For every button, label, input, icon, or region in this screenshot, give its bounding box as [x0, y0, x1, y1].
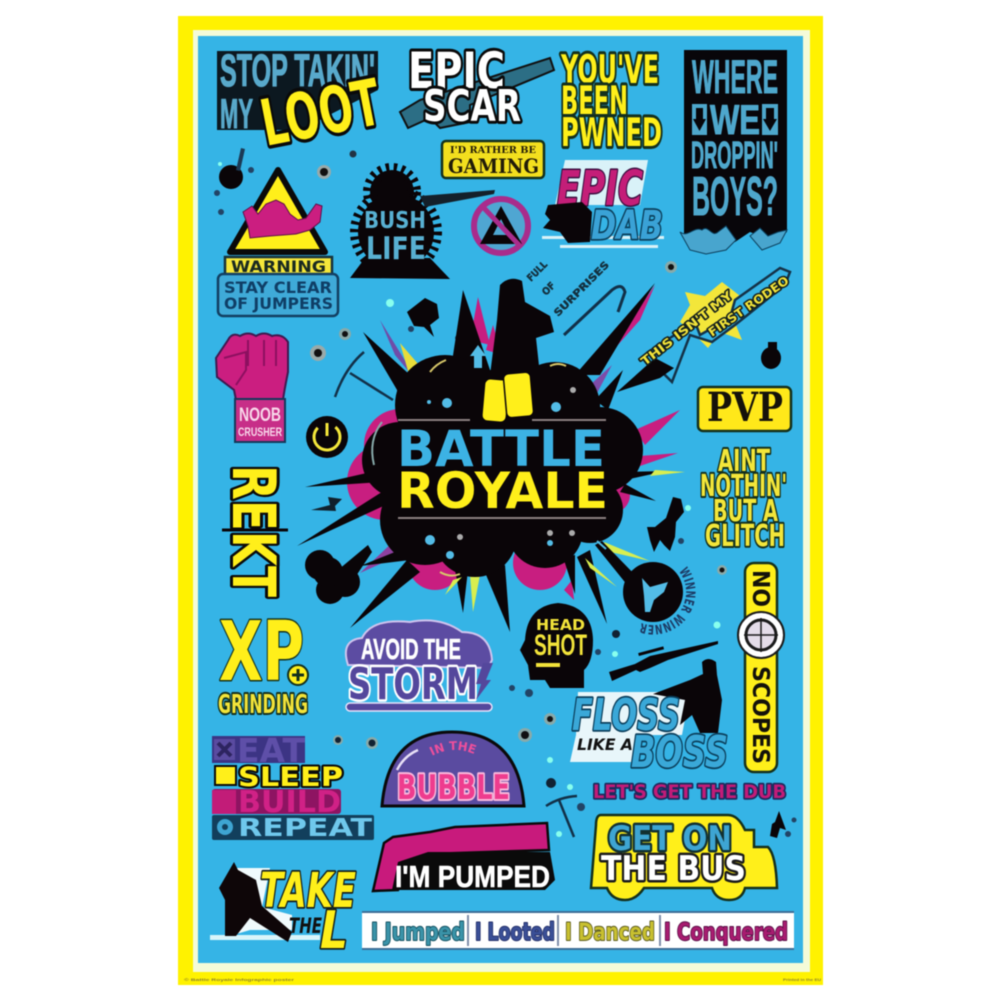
heading: floss like a boss: LIKE A [577, 735, 633, 754]
icon: smoke cloud [305, 545, 372, 604]
icon: rope launcher first rodeo: FIRST RODEO [706, 273, 792, 339]
icon: dog tags [482, 372, 534, 422]
icon: shotgun i'm pumped: I'M PUMPED [395, 859, 550, 894]
heading: xp grinding [218, 605, 308, 720]
icon: fist [216, 334, 288, 442]
heading: you've been pwned: PWNED [561, 111, 662, 156]
panel: warning stay clear of jumpers: OF JUMPERS [224, 294, 333, 313]
panel: i jumped i looted i danced i conquered: I Looted [475, 918, 555, 946]
heading: you've been pwned: BEEN [561, 79, 628, 124]
footer fine print: Printed in the EU [783, 978, 822, 982]
panel: in the bubble [380, 730, 526, 808]
heading: epic scar: EPIC [408, 42, 505, 100]
panel: where we droppin' boys: BOYS? [692, 165, 778, 227]
heading: you've been pwned [560, 48, 662, 156]
icon: bullet mark [770, 811, 796, 838]
heading: epic scar: SCAR [423, 81, 521, 132]
panel: take the l [210, 862, 356, 961]
heading: epic dab: DAB [591, 203, 663, 249]
panel: no scopes: NO [747, 570, 773, 607]
icon: small cloud burst [407, 298, 439, 337]
bullet holes and dots [214, 150, 727, 837]
badge: i'd rather be gaming: I'D RATHER BE [450, 146, 536, 156]
title: battle royale [397, 419, 608, 520]
heading: floss like a boss [570, 659, 728, 778]
panel: warning stay clear of jumpers: STAY CLEAR [224, 278, 332, 297]
title: battle royale: BATTLE [397, 420, 605, 478]
text: full of surprises: FULL [525, 259, 550, 284]
icon: head shot: HEAD [536, 616, 585, 634]
icon: power button [306, 416, 348, 458]
icon: fist: NOOB [239, 405, 281, 426]
heading: aint nothin' but a glitch: AINT [718, 444, 770, 479]
panel: no scopes [738, 563, 784, 772]
heading: aint nothin' but a glitch [700, 444, 787, 554]
panel: i jumped i looted i danced i conquered: I Conquered [664, 918, 788, 946]
panel: where we droppin' boys: DROPPIN' [691, 135, 778, 177]
icon: pickaxe small [546, 796, 577, 837]
icon: llama [647, 497, 684, 552]
icon: hook and rope [564, 286, 625, 335]
icon: rope launcher first rodeo: THIS ISN'T MY [638, 288, 735, 368]
icon: head shot [520, 603, 593, 688]
icon: head shot: SHOT [534, 629, 587, 662]
heading: rekt: REKT [218, 465, 288, 597]
panel: eat sleep build repeat: BUILD [238, 785, 341, 820]
text: full of surprises: OF [540, 280, 558, 298]
heading: aint nothin' but a glitch: GLITCH [705, 519, 785, 554]
text: full of surprises [525, 259, 612, 319]
panel: eat sleep build repeat: REPEAT [238, 813, 372, 842]
icon: lightning bolt [311, 497, 342, 511]
text: full of surprises: SURPRISES [552, 260, 612, 319]
icon: shotgun i'm pumped [373, 823, 555, 894]
heading: stop takin' my loot: LOOT [255, 66, 387, 162]
panel: eat sleep build repeat [212, 731, 374, 842]
panel: get on the bus: THE BUS [601, 849, 746, 889]
heading: aint nothin' but a glitch: BUT A [713, 494, 778, 529]
icon: sniper rifle [609, 641, 718, 681]
heading: floss like a boss: FLOSS [572, 690, 680, 741]
panel: warning stay clear of jumpers [218, 170, 338, 316]
explosion: black spikes [297, 283, 666, 632]
footer fine print [184, 978, 822, 982]
heading: bush life [350, 170, 495, 279]
panel: get on the bus: GET ON [608, 819, 732, 859]
icon: grenade [761, 342, 781, 369]
icon: frying pan winner winner: WINNER WINNER [640, 566, 696, 636]
icon: paint splat ball [219, 148, 245, 189]
heading: aint nothin' but a glitch: NOTHIN' [700, 469, 787, 504]
panel: take the l: TAKE [260, 863, 356, 919]
explosion: magenta backdrop [347, 285, 680, 600]
panel: eat sleep build repeat: SLEEP [238, 762, 343, 793]
heading: epic scar [400, 42, 554, 132]
icon: crossed out triangle [474, 199, 528, 253]
panel: take the l: L [320, 901, 348, 961]
panel: no scopes: SCOPES [747, 666, 773, 764]
heading: avoid the storm: STORM [348, 659, 478, 710]
icon: frying pan winner winner [594, 540, 696, 636]
panel: in the bubble: IN THE [428, 740, 477, 756]
panel: i jumped i looted i danced i conquered [362, 911, 794, 950]
panel: take the l: THE [289, 914, 322, 938]
footer fine print: © Battle Royale Infographic poster [184, 978, 295, 982]
icon: pickaxe [335, 352, 393, 400]
heading: bush life: BUSH [364, 208, 426, 234]
panel: where we droppin' boys: WHERE [692, 50, 778, 103]
heading: epic dab [542, 160, 664, 249]
icon: rope launcher first rodeo [617, 268, 792, 392]
panel: where we droppin' boys: WE [710, 96, 760, 143]
llama silhouette [490, 279, 554, 375]
title: battle royale: ROYALE [397, 462, 608, 520]
panel: where we droppin' boys [680, 50, 787, 254]
icon: fist: CRUSHER [238, 425, 282, 439]
panel: i jumped i looted i danced i conquered: I Jumped [371, 918, 465, 946]
heading: stop takin' my loot: STOP TAKIN' [220, 45, 375, 96]
panel: eat sleep build repeat: EAT [237, 731, 305, 770]
heading: you've been pwned: YOU'VE [560, 48, 659, 93]
heading: xp grinding: GRINDING [218, 690, 308, 720]
heading: epic dab: EPIC [557, 161, 643, 217]
heading: let's get the dub: LET'S GET THE DUB [593, 781, 786, 803]
panel: warning stay clear of jumpers: WARNING [231, 257, 326, 276]
heading: floss like a boss: BOSS [631, 727, 728, 778]
panel: get on the bus [591, 815, 777, 900]
panel: in the bubble: BUBBLE [397, 768, 510, 808]
heading: bush life: LIFE [366, 231, 426, 267]
panel: i jumped i looted i danced i conquered: I Danced [565, 918, 655, 946]
heading: avoid the storm [346, 620, 493, 711]
heading: stop takin' my loot: MY [220, 90, 253, 137]
explosion: black cloud [362, 355, 643, 577]
badge: i'd rather be gaming [442, 141, 544, 178]
heading: stop takin' my loot [217, 45, 387, 162]
heading: avoid the storm: AVOID THE [361, 634, 461, 666]
explosion: dots [372, 345, 576, 576]
badge: i'd rather be gaming: GAMING [448, 154, 539, 178]
poster frame [178, 16, 823, 985]
badge: pvp: PVP [707, 384, 783, 431]
heading: xp grinding: XP [219, 605, 304, 700]
explosion: yellow-green streaks [445, 470, 685, 612]
